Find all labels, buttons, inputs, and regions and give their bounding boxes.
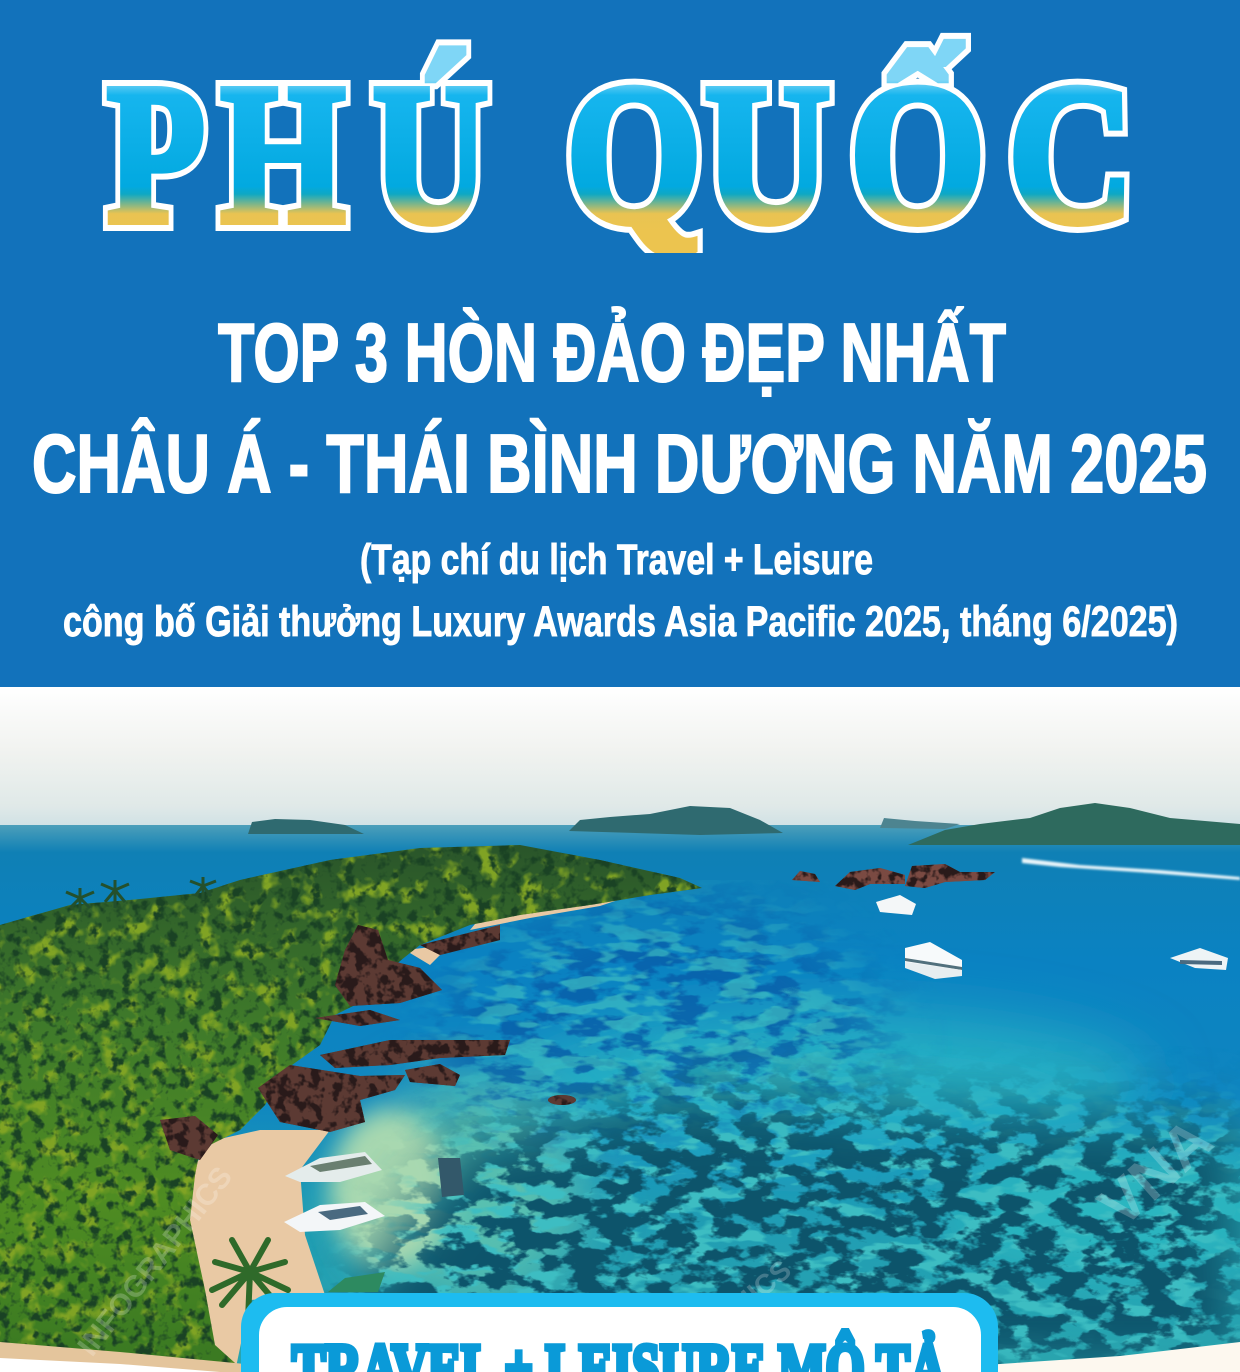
coastal rocks (160, 925, 576, 1160)
coral reef patches (326, 891, 1240, 1364)
boat wake (1022, 858, 1240, 880)
title: PHÚ QUỐC: PHÚ (107, 44, 488, 265)
photo: aerial view of Phú Quốc island (0, 687, 1240, 1372)
sea rocks (792, 864, 995, 890)
source note (63, 536, 1178, 646)
watermark (77, 1126, 1215, 1356)
watermark: GRAPHICS (664, 1254, 797, 1372)
sky (0, 687, 1240, 827)
title: PHÚ QUỐC: QUỐC (566, 43, 1134, 265)
sea (0, 825, 1240, 1372)
palm trees on the horizon (66, 877, 216, 912)
source note: (Tạp chí du lịch Travel + Leisure (360, 536, 873, 584)
boats (284, 895, 1228, 1292)
watermark: INFOGRAPHICS (72, 1161, 239, 1362)
title: PHÚ QUỐC (107, 43, 1134, 265)
white seabed corner and sand edge (0, 1342, 1240, 1372)
title: PHÚ QUỐC: QUỐC (566, 43, 1134, 265)
title: PHÚ QUỐC: PHÚ (107, 44, 488, 265)
palm tree on the beach (212, 1240, 288, 1320)
panel: Travel + Leisure description (241, 1293, 998, 1372)
headline (32, 305, 1207, 510)
distant islands (248, 803, 1240, 845)
watermark: VNA (1086, 1105, 1225, 1240)
island land with forest (0, 840, 720, 1372)
header background (0, 0, 1240, 687)
shore sand (170, 896, 630, 1372)
